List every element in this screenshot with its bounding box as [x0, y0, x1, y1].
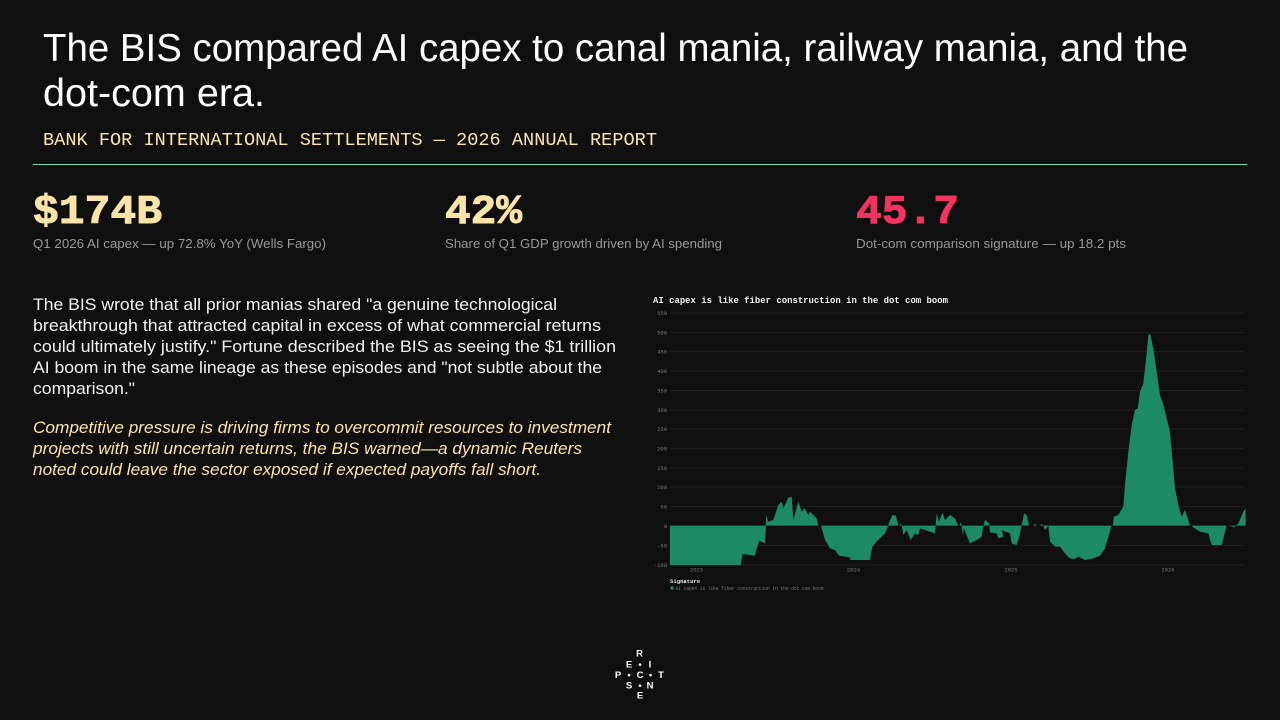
stat: dot-com signature: Dot-com comparison signature — up 18.2 pts	[856, 237, 1126, 251]
y axis labels: 450	[657, 348, 667, 356]
y axis labels: -50	[657, 542, 667, 550]
logo: wordmark of letters and dots: I	[649, 660, 651, 670]
body paragraph: comparison."	[33, 379, 135, 398]
logo: wordmark of letters and dots	[615, 648, 664, 702]
italic note: Competitive pressure is driving firms to overcommit resources to investment	[33, 418, 612, 437]
area chart: AI capex signature	[653, 295, 1246, 592]
y axis labels: 250	[657, 426, 667, 433]
logo: wordmark of letters and dots: P	[615, 670, 622, 681]
x axis labels: 2025	[1004, 566, 1018, 574]
logo: wordmark of letters and dots: •	[649, 670, 653, 681]
body paragraph: AI boom in the same lineage as these episodes and "not subtle about the	[33, 358, 602, 377]
y axis labels: 50	[660, 504, 667, 510]
title: dot-com era.	[43, 72, 265, 115]
stat: AI capex: $174B	[33, 190, 162, 236]
logo: wordmark of letters and dots: S	[626, 680, 632, 692]
y axis labels: 0	[664, 523, 667, 530]
italic note: noted could leave the sector exposed if expected payoffs fall short.	[33, 460, 541, 479]
stat: dot-com signature: 45.7	[856, 190, 959, 236]
stat: GDP growth share	[445, 190, 722, 251]
y axis labels: 550	[657, 310, 667, 317]
y axis labels: 500	[657, 330, 667, 336]
y axis labels: 150	[657, 465, 667, 472]
body paragraph: could ultimately justify." Fortune described the BIS as seeing the $1 trillion	[33, 337, 616, 356]
chart legend: AI capex is like fiber construction in the dot com boom	[676, 585, 824, 592]
y axis labels	[654, 310, 667, 569]
chart legend: Signature	[670, 578, 701, 585]
y axis labels: -100	[654, 562, 667, 569]
logo: wordmark of letters and dots: •	[638, 680, 642, 692]
x axis labels: 2024	[847, 566, 861, 574]
logo: wordmark of letters and dots: •	[638, 660, 642, 670]
body paragraph: The BIS wrote that all prior manias shared "a genuine technological	[33, 295, 557, 314]
stat: GDP growth share: Share of Q1 GDP growth driven by AI spending	[445, 237, 722, 251]
y axis labels: 350	[657, 388, 667, 394]
area series	[670, 333, 1246, 565]
stat: AI capex: Q1 2026 AI capex — up 72.8% YoY (Wells Fargo)	[33, 237, 326, 251]
body paragraph: breakthrough that attracted capital in excess of what commercial returns	[33, 316, 601, 335]
stat: AI capex	[33, 190, 326, 251]
stat: dot-com signature	[856, 190, 1126, 251]
italic note	[32, 418, 612, 479]
logo: wordmark of letters and dots: E	[637, 690, 643, 702]
logo: wordmark of letters and dots: E	[626, 660, 632, 670]
logo: wordmark of letters and dots: R	[636, 648, 643, 660]
logo: wordmark of letters and dots: N	[647, 680, 654, 692]
title	[43, 27, 1188, 115]
stat: GDP growth share: 42%	[445, 190, 522, 236]
x axis labels	[690, 566, 1175, 574]
x axis labels: 2023	[690, 566, 703, 574]
y axis labels: 400	[657, 368, 667, 375]
y axis labels: 100	[657, 484, 667, 491]
x axis labels: 2026	[1161, 566, 1175, 574]
body paragraph	[33, 295, 616, 398]
subtitle: BANK FOR INTERNATIONAL SETTLEMENTS — 2026 ANNUAL REPORT	[43, 130, 657, 151]
logo: wordmark of letters and dots: C	[637, 670, 644, 681]
italic note: projects with still uncertain returns, the BIS warned—a dynamic Reuters	[32, 439, 582, 458]
logo: wordmark of letters and dots: T	[658, 670, 664, 681]
title: The BIS compared AI capex to canal mania, railway mania, and the	[43, 27, 1188, 70]
y axis labels: 300	[657, 407, 667, 414]
y axis labels: 200	[657, 446, 667, 452]
chart title: AI capex is like fiber construction in the dot com boom	[653, 295, 948, 306]
chart legend	[670, 578, 824, 592]
logo: wordmark of letters and dots: •	[627, 670, 631, 681]
